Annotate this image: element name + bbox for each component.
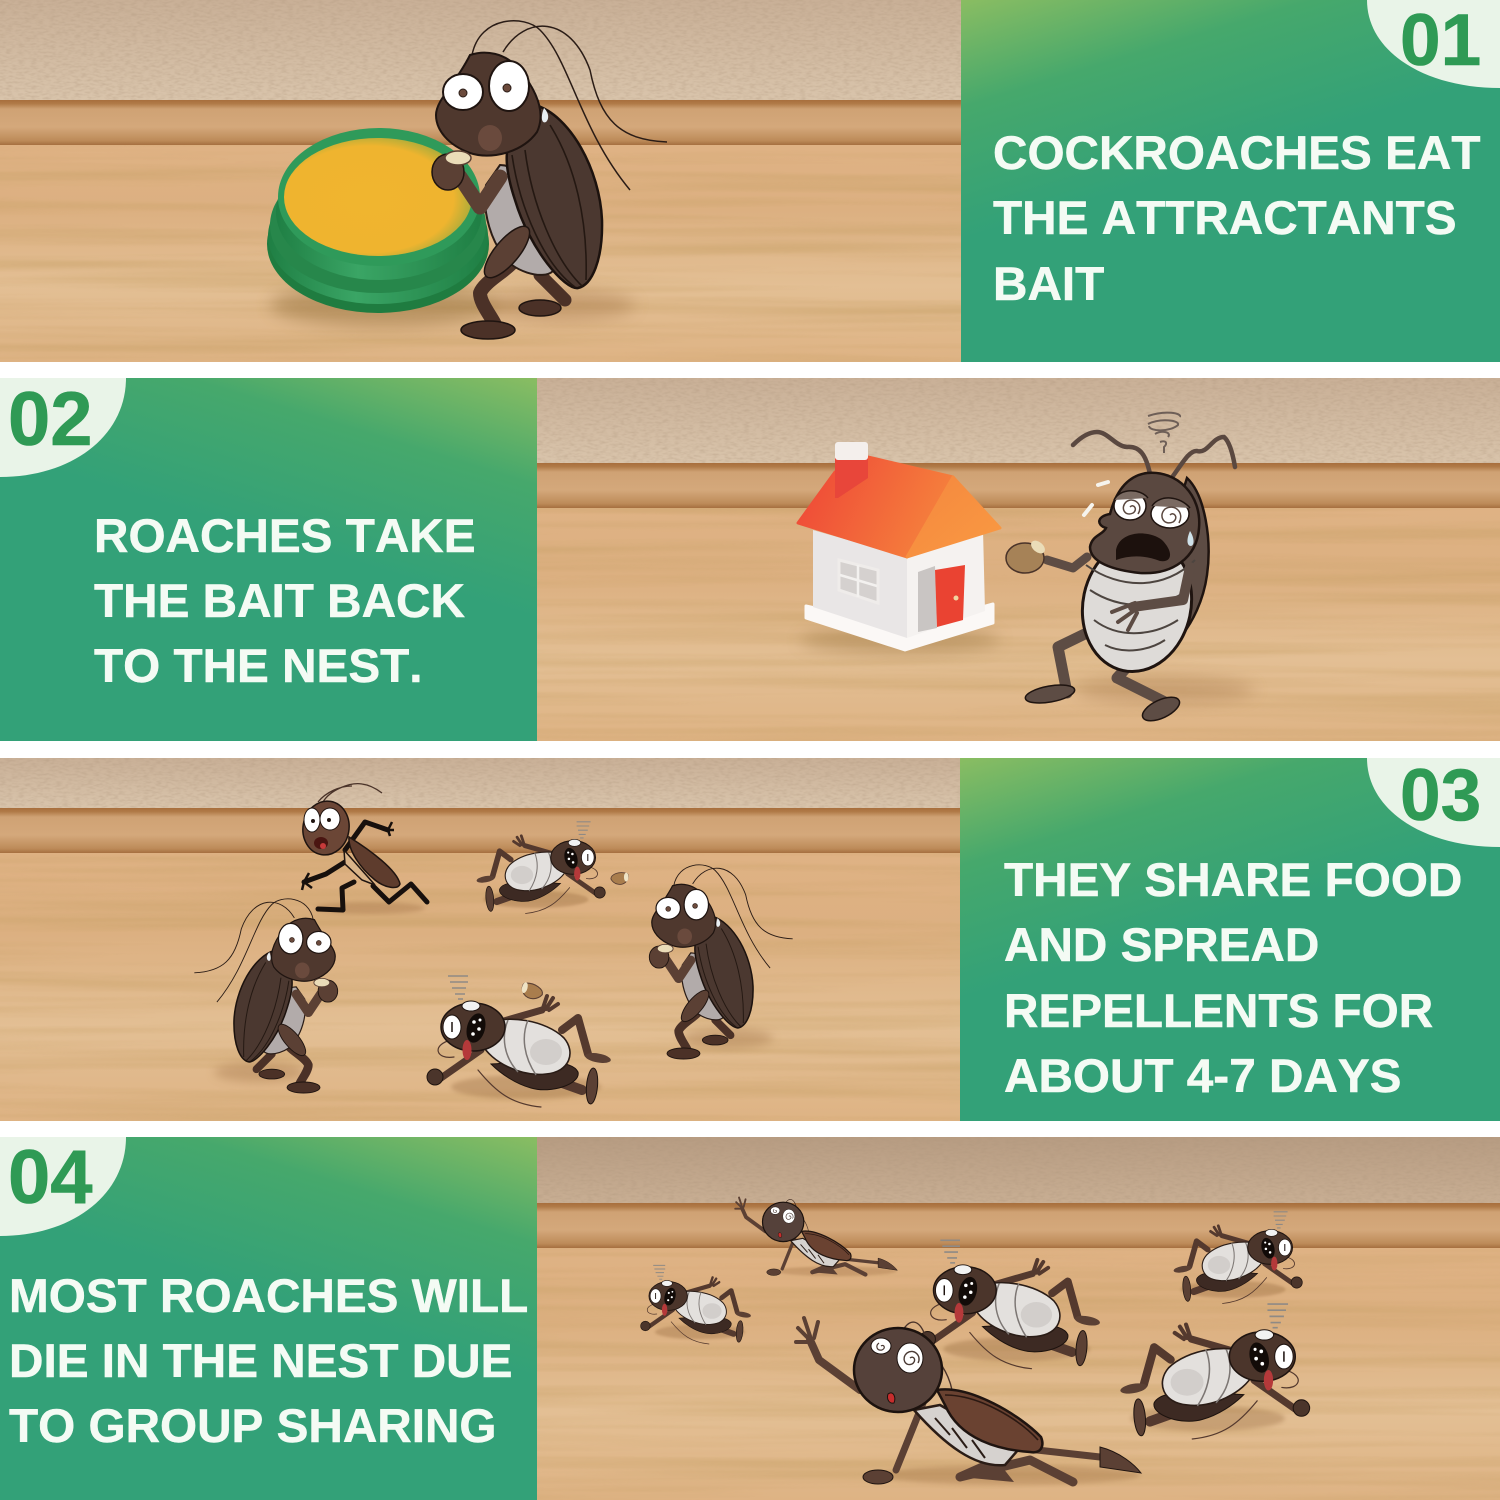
panel: step 2 scene xyxy=(537,378,1500,741)
step 2 caption xyxy=(94,510,476,693)
step 3 caption: AND SPREAD xyxy=(1004,919,1319,972)
step 4 caption: TO GROUP SHARING xyxy=(9,1400,496,1453)
icon: bait crumb bottom xyxy=(520,982,544,1001)
icon: dizzy cockroach carrying bait xyxy=(1006,413,1255,726)
icon: dead cockroach top xyxy=(476,822,605,914)
step 1 caption: THE ATTRACTANTS xyxy=(993,192,1457,245)
step 3 caption: ABOUT 4-7 DAYS xyxy=(1004,1050,1401,1103)
icon: dead cockroach top right xyxy=(1173,1212,1302,1304)
step 2 caption: ROACHES TAKE xyxy=(94,510,476,563)
icon: house xyxy=(798,442,1000,654)
number badge 01: 01 xyxy=(1400,0,1481,81)
panel: step 4 scene xyxy=(537,1137,1500,1500)
icon: cockroach eating right xyxy=(649,865,793,1059)
bait dish xyxy=(267,128,500,327)
number badge 02: 02 xyxy=(8,377,93,462)
step 3 caption: REPELLENTS FOR xyxy=(1004,985,1433,1038)
step 3 caption: THEY SHARE FOOD xyxy=(1004,854,1462,907)
step 3 caption xyxy=(1004,854,1462,1103)
step 4 caption: MOST ROACHES WILL xyxy=(9,1270,528,1323)
number badge 01 xyxy=(1367,0,1500,88)
step 2 caption: TO THE NEST. xyxy=(94,640,423,693)
step 4 caption: DIE IN THE NEST DUE xyxy=(9,1335,512,1388)
icon: crawling cockroach small xyxy=(735,1197,897,1276)
icon: dead cockroach small left xyxy=(641,1265,751,1344)
icon: crawling cockroach large xyxy=(796,1318,1141,1485)
panel: step 3 scene xyxy=(0,758,961,1121)
panel: step 1 text xyxy=(961,0,1500,362)
step 1 caption xyxy=(993,127,1480,311)
panel: step 2 text xyxy=(0,377,538,741)
icon: dead cockroach lower right xyxy=(1120,1304,1310,1439)
icon: running cockroach xyxy=(299,784,427,914)
icon: dead cockroach centre xyxy=(920,1240,1101,1369)
number badge 03: 03 xyxy=(1400,755,1481,836)
number badge 03 xyxy=(1367,755,1500,847)
icon: bait crumb top xyxy=(611,873,628,884)
step 1 caption: COCKROACHES EAT xyxy=(993,127,1480,180)
icon: cockroach eating left xyxy=(194,899,338,1093)
panel: step 4 text xyxy=(0,1135,538,1500)
number badge 04: 04 xyxy=(8,1135,93,1220)
step 2 caption: THE BAIT BACK xyxy=(94,575,465,628)
step 1 caption: BAIT xyxy=(993,258,1104,311)
panel: step 3 text xyxy=(960,755,1500,1121)
panel: step 1 scene xyxy=(0,0,961,362)
step 4 caption xyxy=(9,1270,528,1453)
icon: dead cockroach bottom xyxy=(427,976,612,1107)
number badge 02 xyxy=(0,377,126,477)
icon: cockroach eating bait xyxy=(432,21,667,339)
number badge 04 xyxy=(0,1135,126,1236)
